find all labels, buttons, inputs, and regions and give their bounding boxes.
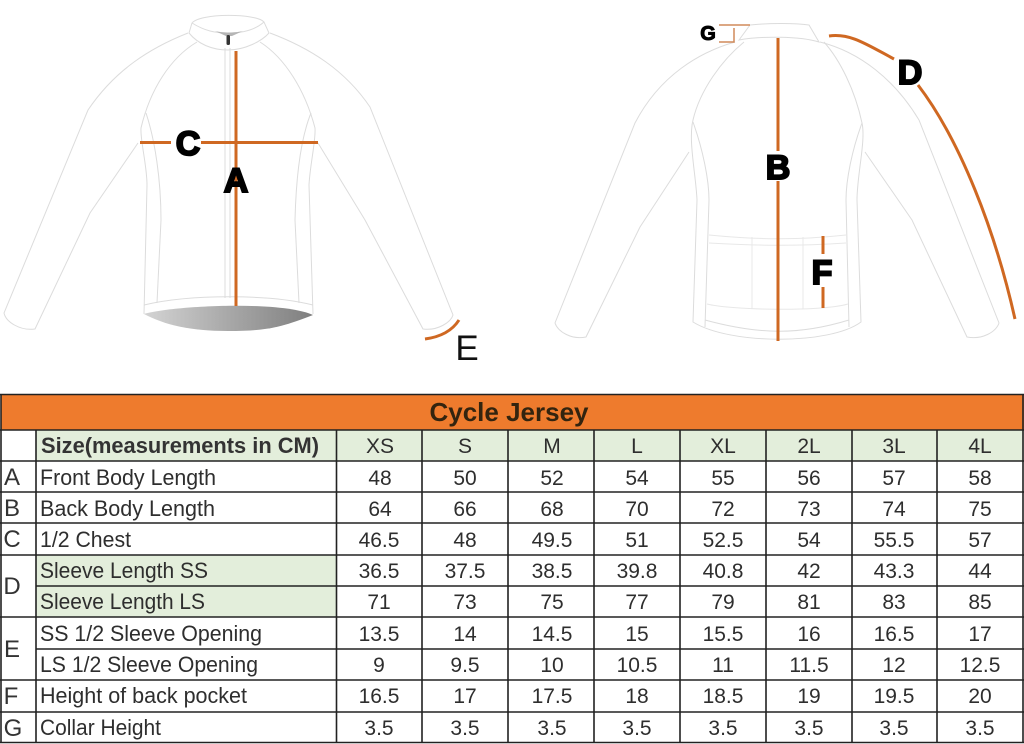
row G: 3.5 [450, 717, 480, 740]
row F: 16.5 [359, 685, 399, 708]
label D: D [898, 54, 922, 92]
header row: 4L [968, 435, 992, 458]
green shaded cells [36, 430, 1024, 617]
row F: F [4, 683, 18, 710]
row E: 14.5 [532, 623, 572, 646]
label F: F [812, 254, 832, 292]
row G: 3.5 [965, 717, 995, 740]
row B: B [4, 495, 20, 522]
label E: E [455, 329, 479, 368]
row D: 71 [367, 591, 391, 614]
row D: 73 [453, 591, 477, 614]
row F: 20 [968, 685, 992, 708]
row A: 52 [540, 467, 564, 490]
row E: 9.5 [450, 654, 480, 677]
row D: D [3, 573, 21, 600]
size table [0, 394, 1024, 743]
header row [41, 433, 992, 458]
row B: 75 [968, 498, 992, 521]
row B: 68 [540, 498, 564, 521]
row C: C [3, 526, 21, 553]
row A: 58 [968, 467, 992, 490]
row E: 12 [882, 654, 906, 677]
row D: 39.8 [617, 560, 657, 583]
row A: 55 [711, 467, 735, 490]
row B: 70 [625, 498, 649, 521]
row B: 72 [711, 498, 735, 521]
row B: 74 [882, 498, 906, 521]
line A [234, 51, 238, 306]
row E: 11.5 [789, 654, 829, 677]
header row: Size(measurements in CM) [41, 433, 319, 458]
front jersey diagram [4, 15, 479, 368]
line B [776, 38, 780, 341]
header row: XL [710, 435, 736, 458]
row G: 3.5 [537, 717, 567, 740]
row E: 9 [373, 654, 385, 677]
row E: 15 [625, 623, 649, 646]
label C: C [176, 125, 200, 163]
row C: 1/2 Chest [40, 527, 131, 552]
line E [425, 320, 459, 339]
row F: 19 [797, 685, 821, 708]
row D: 81 [797, 591, 821, 614]
jersey front outline [4, 15, 453, 329]
row E [4, 621, 1000, 677]
row A: 57 [882, 467, 906, 490]
row A: A [4, 464, 20, 491]
row B: Back Body Length [40, 496, 215, 521]
row G: G [4, 715, 22, 742]
row F: 17.5 [532, 685, 572, 708]
row E: 13.5 [359, 623, 399, 646]
zipper [215, 31, 243, 45]
header row: XS [366, 435, 394, 458]
row F: 18 [625, 685, 649, 708]
row D: 75 [540, 591, 564, 614]
row D: 38.5 [532, 560, 572, 583]
row B: 64 [368, 498, 392, 521]
row D: 36.5 [359, 560, 399, 583]
row A: 48 [368, 467, 392, 490]
row A: Front Body Length [40, 465, 216, 490]
row D: 42 [797, 560, 821, 583]
row D: 79 [711, 591, 735, 614]
row F [4, 683, 992, 710]
row B: 73 [797, 498, 821, 521]
row D: 77 [625, 591, 649, 614]
label B: B [766, 149, 790, 187]
table title bar [1, 395, 1024, 430]
line C [140, 141, 318, 144]
row C [3, 526, 992, 553]
row F: 18.5 [703, 685, 743, 708]
row B: 66 [453, 498, 477, 521]
row A: 50 [453, 467, 477, 490]
row G: 3.5 [794, 717, 824, 740]
row D: Sleeve Length LS [40, 589, 205, 614]
row B [4, 495, 992, 522]
header row: L [631, 435, 643, 458]
row C: 55.5 [874, 529, 914, 552]
row A [4, 464, 992, 491]
row C: 48 [453, 529, 477, 552]
row D: 40.8 [703, 560, 743, 583]
line G [719, 25, 750, 42]
line F [822, 236, 824, 308]
row C: 46.5 [359, 529, 399, 552]
row E: 10 [540, 654, 564, 677]
row A: 54 [625, 467, 649, 490]
row E: 16 [797, 623, 821, 646]
row E: 16.5 [874, 623, 914, 646]
row C: 57 [968, 529, 992, 552]
row A: 56 [797, 467, 821, 490]
row E: 10.5 [617, 654, 657, 677]
row C: 49.5 [532, 529, 572, 552]
label G: G [700, 23, 716, 45]
jersey hem [144, 306, 313, 331]
row D [3, 558, 992, 614]
header row: S [458, 435, 472, 458]
row E: 14 [453, 623, 477, 646]
row F: 19.5 [874, 685, 914, 708]
row D: Sleeve Length SS [40, 558, 208, 583]
row G: 3.5 [622, 717, 652, 740]
row G: Collar Height [40, 715, 161, 740]
row F: 17 [453, 685, 477, 708]
row E: 12.5 [960, 654, 1000, 677]
table title bar: Cycle Jersey [429, 397, 589, 427]
label A: A [224, 162, 248, 200]
row C: 54 [797, 529, 821, 552]
row F: Height of back pocket [40, 683, 247, 708]
header row: 3L [882, 435, 906, 458]
header row: M [543, 435, 561, 458]
row D: 37.5 [445, 560, 485, 583]
row E: E [4, 636, 20, 663]
row E: 17 [968, 623, 992, 646]
row D: 83 [882, 591, 906, 614]
row G: 3.5 [364, 717, 394, 740]
row D: 85 [968, 591, 992, 614]
row G: 3.5 [879, 717, 909, 740]
row C: 51 [625, 529, 649, 552]
header row: 2L [797, 435, 821, 458]
back pockets [707, 235, 848, 309]
row G [4, 715, 995, 742]
back jersey diagram [555, 23, 1015, 341]
row G: 3.5 [708, 717, 738, 740]
row D: 44 [968, 560, 992, 583]
row E: LS 1/2 Sleeve Opening [40, 652, 258, 677]
line D [829, 36, 1015, 319]
row C: 52.5 [703, 529, 743, 552]
row E: SS 1/2 Sleeve Opening [40, 621, 262, 646]
jersey back outline [555, 24, 999, 339]
table grid [0, 394, 1024, 743]
row E: 15.5 [703, 623, 743, 646]
row D: 43.3 [874, 560, 914, 583]
row E: 11 [712, 654, 734, 677]
